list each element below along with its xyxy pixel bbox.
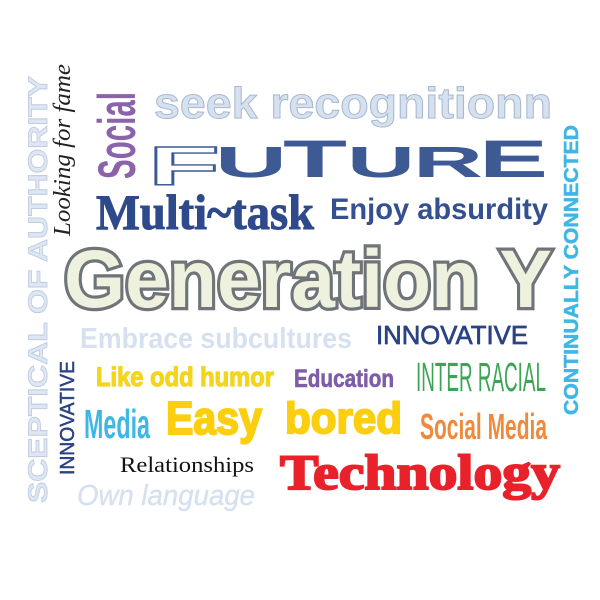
word: Social vertical: Social (88, 92, 147, 179)
word: Multi-task: Multi~task (96, 184, 314, 240)
word: Looking for fame: Looking for fame (50, 64, 76, 237)
word: seek recognitionn: seek recognitionn (154, 79, 552, 128)
word: Media: Media (84, 401, 151, 447)
word: Like odd humor: Like odd humor (96, 362, 274, 392)
word: Enjoy absurdity: Enjoy absurdity (330, 193, 548, 226)
word: Own language: Own language (77, 480, 255, 512)
word: Education: Education (294, 365, 394, 393)
word: Innovative horizontal: INNOVATIVE (376, 320, 528, 350)
word: Future: E (479, 130, 548, 189)
word: Future: R (413, 138, 483, 187)
word: bored: bored (285, 394, 402, 443)
word: Technology: Technology (280, 444, 560, 500)
word: Future: T (283, 130, 347, 189)
word: Future: U (215, 138, 287, 187)
word: Sceptical of authority: SCEPTICAL OF AUTHORITY (23, 76, 53, 503)
word: Embrace subcultures: Embrace subcultures (80, 323, 352, 355)
word: Easy: Easy (166, 392, 262, 444)
word: Future (148, 130, 548, 197)
word: Future: U (347, 138, 415, 187)
word: Future: F (148, 135, 220, 197)
word: Innovative vertical: INNOVATIVE (57, 361, 79, 475)
word: Relationships: Relationships (120, 452, 254, 477)
title: Generation Y: Generation Y (64, 234, 552, 325)
word: Continually connected: CONTINUALLY CONNECTED (561, 125, 583, 415)
